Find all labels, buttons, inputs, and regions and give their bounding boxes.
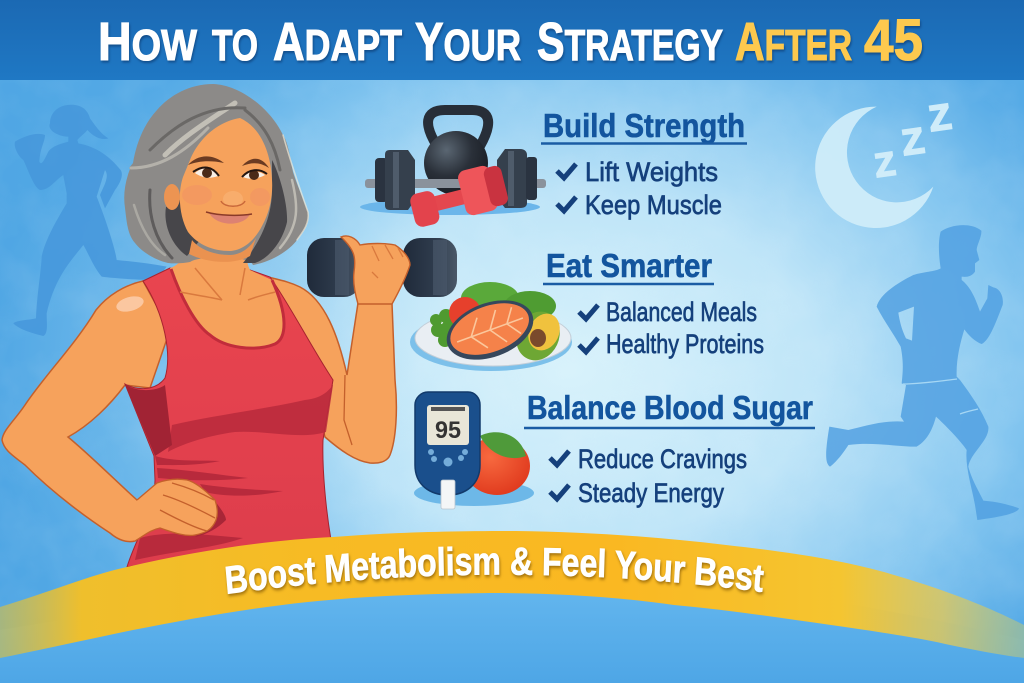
greens (430, 282, 556, 347)
hair strands (131, 103, 308, 258)
eyebrows (188, 156, 269, 168)
neckline trim (171, 269, 284, 348)
salmon (438, 289, 542, 371)
barbell (365, 149, 546, 210)
icon: crescent moon with zzz (815, 96, 954, 228)
icon: kettlebell and barbell (360, 110, 546, 229)
collarbones (180, 268, 275, 300)
tank top shadows (125, 384, 333, 560)
silhouette: woman drinking and running (13, 105, 167, 336)
title: STRATEGY (537, 12, 723, 72)
heading: build strength: Build Strength (543, 107, 745, 144)
icon: crescent moon with zzz: Z (899, 120, 927, 163)
list: balance blood sugar items: Reduce Cravings (578, 444, 747, 474)
tomato (449, 297, 481, 329)
dumbbell in hand (307, 238, 457, 297)
mouth (206, 212, 252, 224)
icon: crescent moon with zzz: Z (872, 145, 897, 184)
meter: 95 (435, 417, 461, 444)
hand on hip (115, 479, 217, 541)
footer area (0, 575, 1024, 683)
title: ADAPT (273, 12, 402, 72)
title: TO (212, 21, 258, 70)
icon: crescent moon with zzz: Z (926, 96, 954, 139)
shadow (360, 199, 540, 215)
list: eat smarter items (579, 297, 764, 359)
nose (221, 191, 245, 207)
list: build strength items: Keep Muscle (585, 190, 722, 220)
chin shadow (189, 238, 256, 262)
gripping hand (341, 236, 410, 304)
icon: salmon plate (410, 282, 572, 371)
neck and chest (170, 240, 284, 348)
list: eat smarter items: Balanced Meals (606, 297, 757, 327)
hair base (124, 84, 308, 265)
list: eat smarter items: Healthy Proteins (606, 329, 764, 359)
banner arc (0, 531, 1024, 658)
avocado (508, 304, 568, 368)
heading: eat smarter: Eat Smarter (546, 247, 712, 284)
title (98, 8, 923, 73)
eyes (193, 167, 267, 180)
title: 45 (864, 8, 923, 73)
list: balance blood sugar items (550, 444, 747, 508)
header band (0, 0, 1024, 80)
list: balance blood sugar items: Steady Energy (578, 478, 724, 508)
face (180, 118, 272, 251)
shoulder highlight (115, 294, 145, 314)
title: HOW (98, 12, 197, 72)
right arm (268, 277, 396, 463)
tomato (464, 432, 530, 495)
silhouette: man running (826, 225, 1019, 520)
heading: balance blood sugar: Balance Blood Sugar (527, 389, 813, 426)
title: YOUR (415, 12, 521, 72)
red dumbbell (406, 162, 510, 229)
forearm crease (344, 375, 352, 445)
woman holding dumbbell (2, 84, 457, 567)
shadow (414, 480, 534, 506)
cheeks (182, 185, 270, 206)
kettlebell (424, 110, 488, 195)
icon: glucose meter and tomato (414, 392, 534, 509)
left arm (2, 281, 170, 542)
title: AFTER (735, 12, 852, 72)
tank top (125, 268, 333, 567)
ear (164, 184, 180, 210)
plate (410, 313, 572, 371)
banner text: Boost Metabolism & Feel Your Best (225, 546, 766, 598)
hair dark underlayer (165, 160, 287, 263)
list: build strength items (557, 157, 722, 220)
list: build strength items: Lift Weights (585, 157, 718, 187)
